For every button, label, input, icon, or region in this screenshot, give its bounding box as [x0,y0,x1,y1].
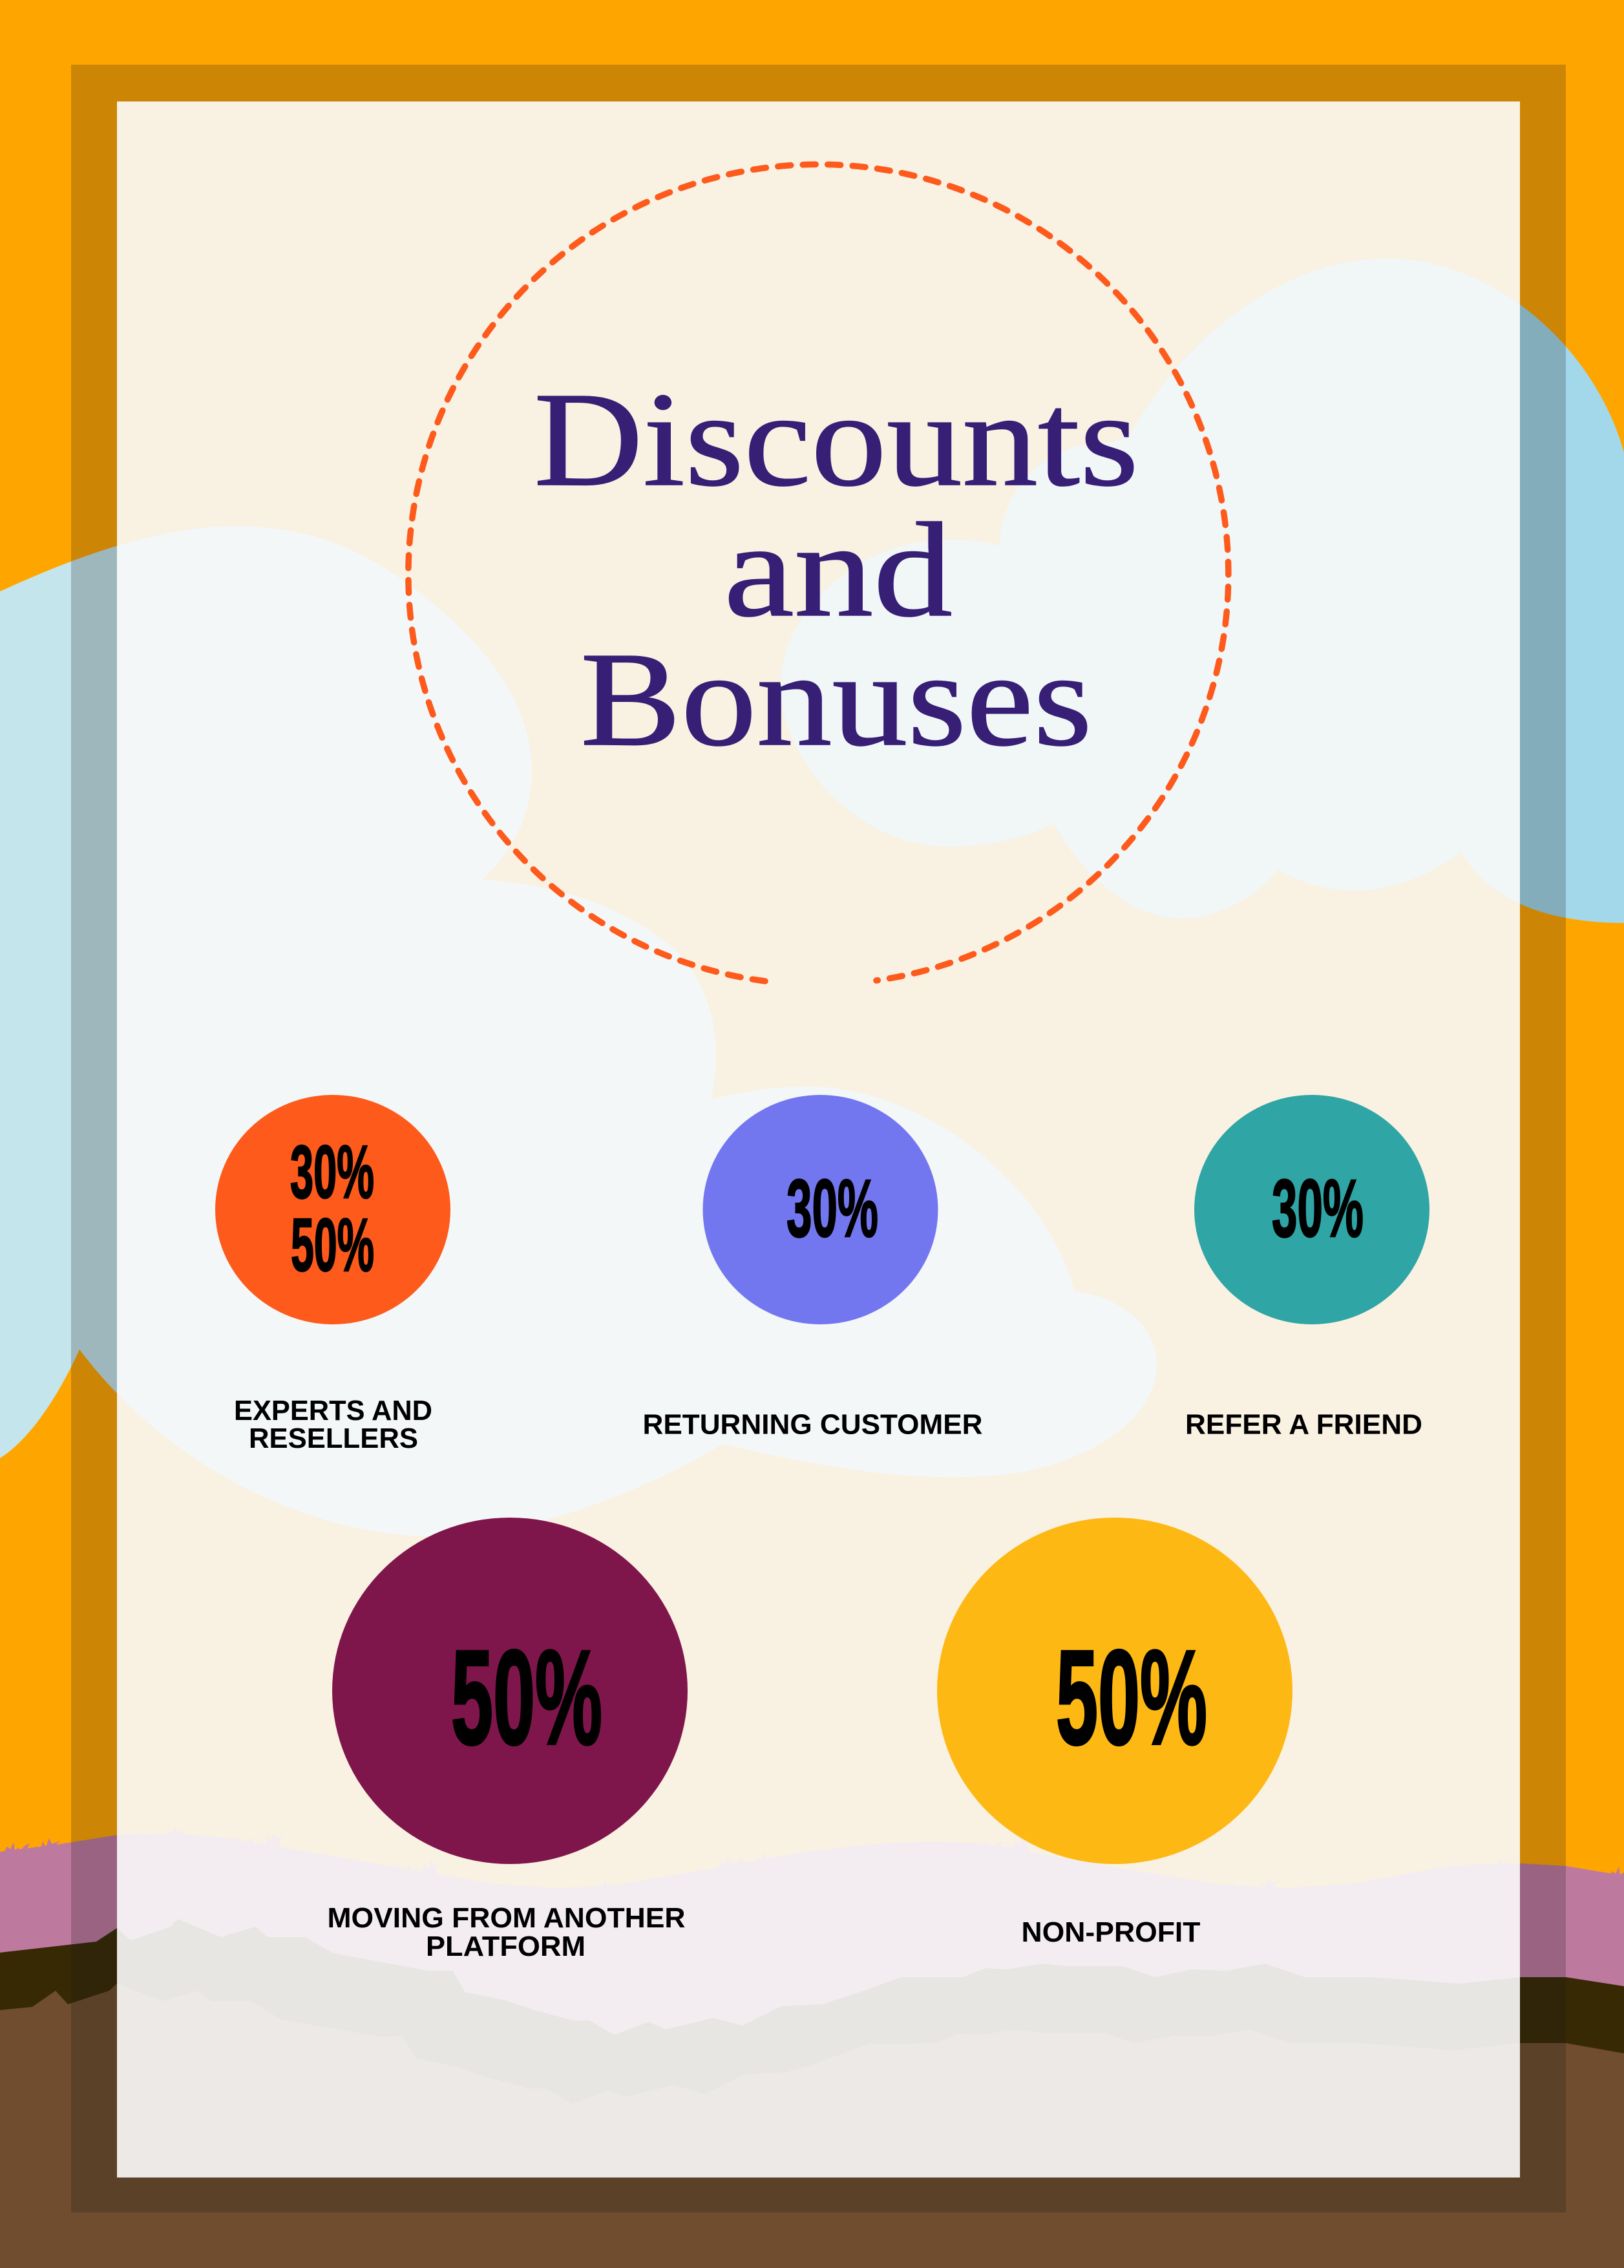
discount values: 30% and 50% [290,1130,374,1287]
label: returning customer: RETURNING CUSTOMER [642,1409,982,1440]
label: non-profit: NON-PROFIT [1021,1917,1201,1948]
badge: non-profit [937,1518,1292,1864]
label: moving from another platform [327,1903,685,1962]
landscape: brown foreground [0,1984,1624,2268]
badge: moving from another platform [332,1518,688,1864]
label: experts and resellers [234,1395,432,1454]
title: Bonuses [580,625,1092,774]
discount value: 50%: 50% [451,1623,602,1773]
badge: refer a friend [1194,1095,1429,1324]
discount value: 50%: 50% [1056,1623,1207,1773]
badge: experts and resellers [215,1095,450,1324]
title [534,365,1139,774]
landscape: purple hills with grass [0,1827,1624,2068]
label: moving from another platform: MOVING FROM ANOTHER [327,1903,685,1934]
discount value: 30%: 30% [786,1163,878,1254]
landscape: dark mountain ridge [0,1919,1624,2133]
dashed circle around title [408,164,1229,981]
label: experts and resellers: RESELLERS [249,1423,418,1454]
title: Discounts [534,365,1139,514]
label: experts and resellers: EXPERTS AND [234,1395,432,1426]
discount values: 30% and 50%: 50% [291,1203,374,1287]
cloud: right [781,259,1624,923]
cloud: left [0,526,1157,1536]
label: moving from another platform: PLATFORM [426,1931,585,1962]
title: and [724,496,953,645]
panel: translucent cream sheet [117,101,1520,2178]
discount value: 30%: 30% [1272,1163,1364,1254]
discount values: 30% and 50%: 30% [290,1130,374,1214]
label: refer a friend: REFER A FRIEND [1185,1409,1422,1440]
badge: returning customer [703,1095,938,1324]
